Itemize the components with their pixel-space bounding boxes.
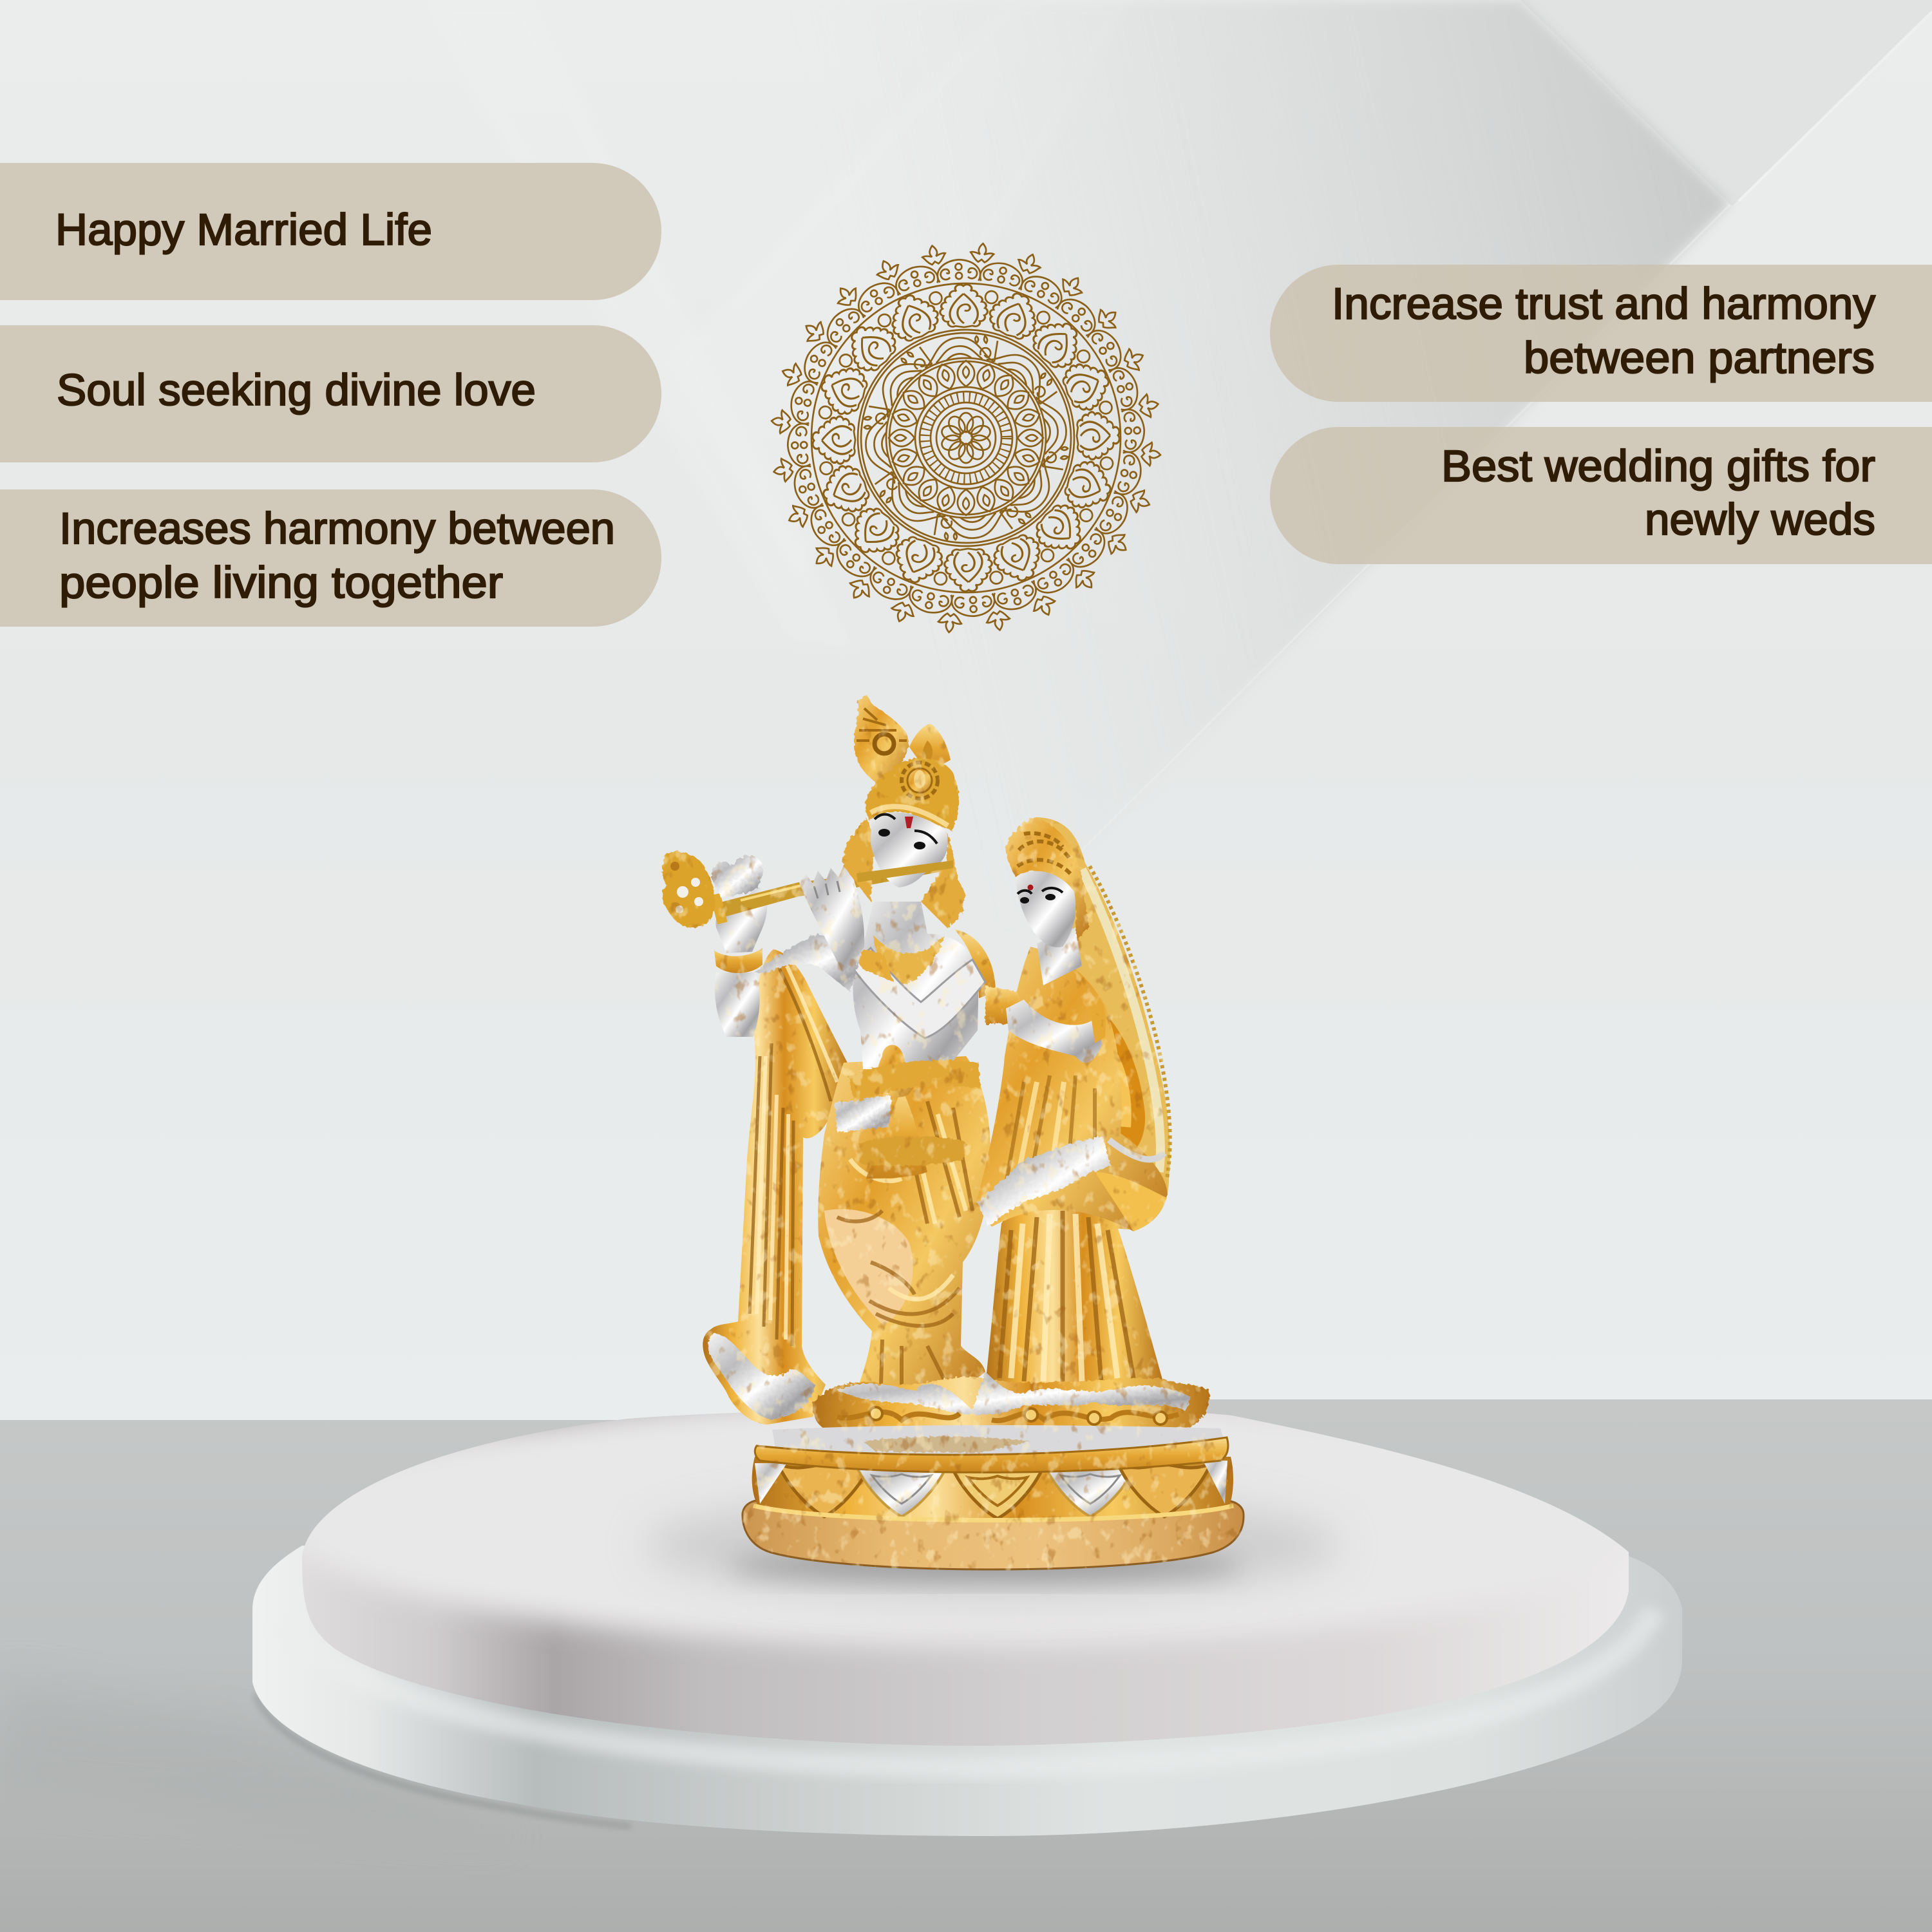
lower disc contact shadow [255, 1694, 631, 1826]
Radha crown [1006, 817, 1088, 940]
scarf and drape [703, 949, 851, 1425]
flute ornament [662, 851, 762, 927]
pill: Increase trust and harmony between partners: between partners [1524, 333, 1875, 383]
reflective platform highlights [863, 1436, 1030, 1453]
Radha arm [985, 985, 1106, 1063]
gold rim [755, 1437, 1228, 1472]
pill: Best wedding gifts for newly weds [1270, 427, 1932, 564]
Krishna right hand [799, 863, 864, 972]
upper disc [302, 1413, 1629, 1746]
lower disc top ring [283, 1610, 1655, 1768]
Krishna dhoti [818, 1056, 990, 1397]
pill: Best wedding gifts for newly weds: Best wedding gifts for [1441, 441, 1875, 491]
lower disc [252, 1546, 1682, 1836]
pill: Best wedding gifts for newly weds: newly weds [1645, 495, 1875, 544]
mandala lotus petals [889, 361, 1043, 515]
Krishna crown [855, 694, 959, 831]
mandala [771, 243, 1161, 633]
statue: Radha Krishna idol [662, 694, 1244, 1569]
mandala tips [771, 243, 1161, 633]
Krishna hair [843, 818, 965, 927]
Krishna left arm [714, 887, 863, 1037]
mandala lobes [787, 259, 1145, 617]
Krishna torso [848, 902, 996, 1103]
shield carvings [755, 1461, 1227, 1519]
Radha neck [1037, 927, 1082, 985]
pill: Happy Married Life: Happy Married Life [55, 205, 432, 254]
mandala arches [862, 334, 1070, 542]
bronze base [743, 1501, 1244, 1569]
base highlight rim [753, 1506, 1233, 1520]
pill: Soul seeking divine love: Soul seeking divine love [57, 365, 536, 415]
pill: Increases harmony between people living together: people living together [59, 558, 503, 607]
lotus wave base [813, 1372, 1209, 1437]
pill: Increase trust and harmony between partners [1270, 265, 1932, 402]
mandala centre flower [940, 413, 992, 463]
floor [0, 1399, 1932, 1932]
metallic statue body [662, 694, 1244, 1569]
Radha face [1016, 871, 1075, 947]
pill: Increases harmony between people living together [0, 489, 661, 627]
background wall [0, 0, 1932, 1436]
Radha torso and sari [976, 947, 1168, 1231]
mandala dots [819, 290, 1113, 585]
pill: Happy Married Life [0, 163, 661, 300]
pedestal [252, 1397, 1682, 1836]
Radha veil [1036, 817, 1170, 1230]
mandala paisleys [812, 284, 1120, 592]
pill: Increases harmony between people living together: Increases harmony between [59, 504, 615, 553]
statue shadow [728, 1551, 1243, 1582]
pill: Soul seeking divine love [0, 325, 661, 462]
Krishna face [857, 812, 953, 887]
carved base [752, 1457, 1233, 1521]
mandala rings [811, 283, 1121, 592]
silver platform [772, 1425, 1227, 1458]
pill: Increase trust and harmony between partners: Increase trust and harmony [1332, 279, 1875, 328]
Radha skirt [985, 1193, 1162, 1385]
flute [710, 863, 953, 924]
